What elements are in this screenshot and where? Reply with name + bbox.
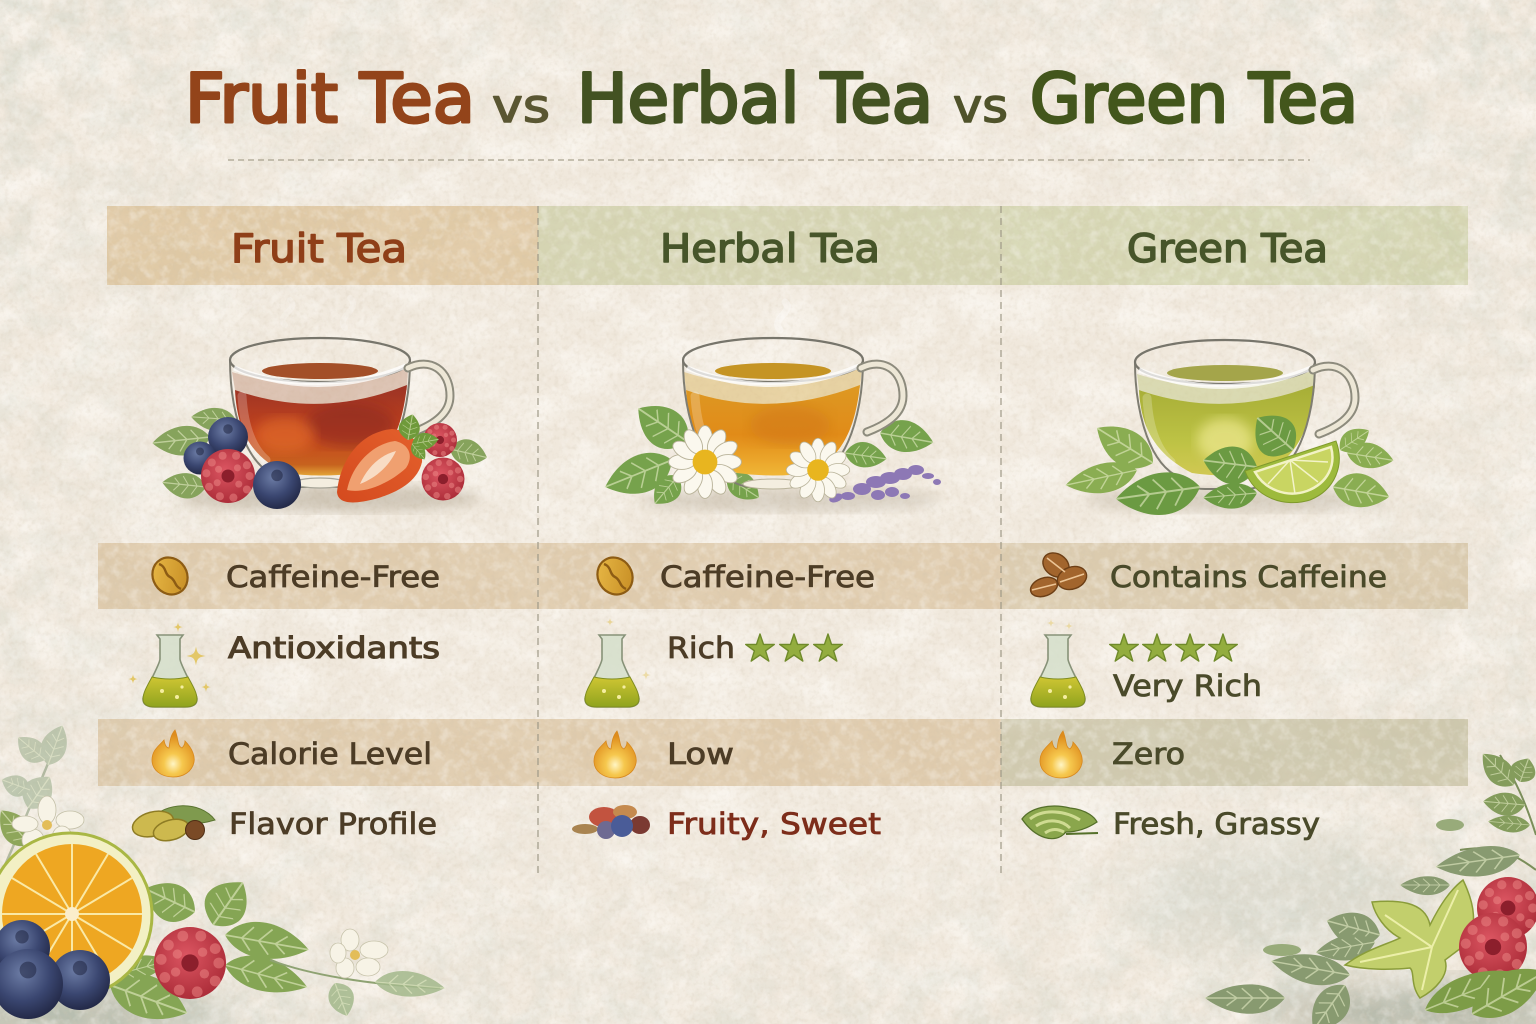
icon: flavor slices, fruit tea bbox=[130, 806, 215, 844]
text: calorie level label: Calorie Level bbox=[228, 737, 432, 771]
icon: flask, green tea bbox=[1031, 619, 1085, 707]
icon: flame, herbal tea bbox=[594, 731, 636, 778]
icon: four stars bbox=[1110, 634, 1237, 661]
icon: coffee bean, fruit tea bbox=[146, 551, 194, 601]
column headings: Herbal Tea bbox=[660, 227, 880, 272]
text: herbal tea flavor: Fruity, Sweet bbox=[667, 807, 881, 841]
row: calories bbox=[152, 730, 1185, 778]
illustration: fruit tea cup bbox=[151, 298, 490, 512]
icon: coffee bean, herbal tea bbox=[591, 551, 639, 601]
panel: table bands bbox=[98, 206, 1468, 786]
illustration: green tea cup bbox=[1063, 340, 1396, 521]
column headings bbox=[231, 227, 1328, 272]
icon: flame, fruit tea bbox=[152, 730, 194, 777]
icon: mixed fruit, herbal tea bbox=[572, 805, 650, 839]
decoration: bottom-left fruit and leaves bbox=[0, 721, 446, 1024]
text: flavor profile label: Flavor Profile bbox=[229, 807, 437, 841]
row: flavor bbox=[130, 805, 1320, 844]
icon: flame, green tea bbox=[1040, 731, 1082, 778]
text: green tea very rich: Very Rich bbox=[1113, 669, 1262, 703]
text: antioxidants label: Antioxidants bbox=[228, 631, 440, 665]
text: herbal tea caffeine: Caffeine-Free bbox=[660, 560, 875, 594]
column headings: Fruit Tea bbox=[231, 227, 407, 272]
illustration: herbal tea cup bbox=[599, 302, 941, 512]
title: Green Tea bbox=[1030, 60, 1358, 139]
row: antioxidants bbox=[128, 618, 1262, 707]
text: green tea caffeine: Contains Caffeine bbox=[1110, 560, 1387, 594]
title: vs bbox=[492, 79, 550, 133]
title bbox=[185, 60, 1358, 139]
text: herbal tea rich: Rich bbox=[667, 631, 735, 665]
text: green tea flavor: Fresh, Grassy bbox=[1113, 807, 1320, 841]
row: caffeine bbox=[146, 548, 1387, 601]
icon: green leaf bud, green tea bbox=[1022, 806, 1098, 839]
column headings: Green Tea bbox=[1127, 227, 1328, 272]
text: herbal tea low: Low bbox=[667, 737, 734, 771]
decoration: bottom-right fruit and leaves bbox=[1205, 746, 1536, 1024]
text: fruit tea caffeine: Caffeine-Free bbox=[226, 560, 440, 594]
icon: flask, herbal tea bbox=[585, 618, 651, 707]
icon: three stars bbox=[746, 634, 842, 661]
title: Fruit Tea bbox=[185, 60, 475, 139]
icon: flask, fruit tea bbox=[128, 622, 211, 707]
text: green tea zero: Zero bbox=[1112, 737, 1185, 771]
title: Herbal Tea bbox=[577, 60, 933, 139]
icon: coffee beans, green tea bbox=[1028, 548, 1090, 600]
title: vs bbox=[953, 79, 1008, 133]
